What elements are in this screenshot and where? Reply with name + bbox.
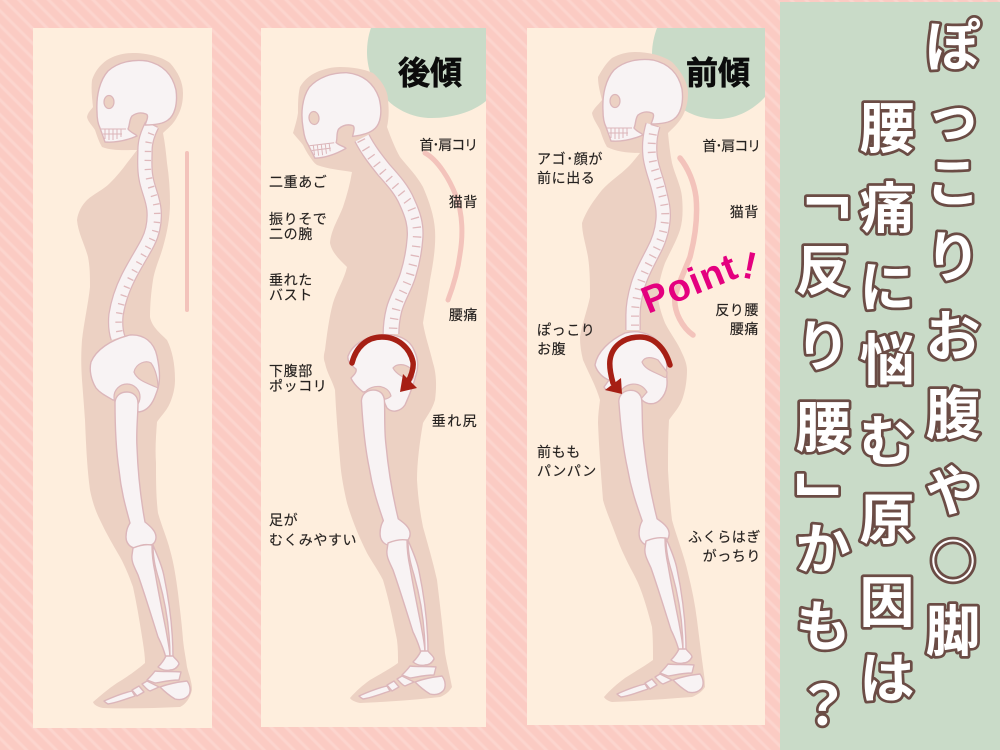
- title: column 3: 反り腰: [795, 226, 851, 463]
- posture line: [185, 153, 189, 310]
- icon: femur: [618, 388, 670, 547]
- panel: anterior tilt: [527, 28, 765, 725]
- labels: posterior tilt left: 振りそで: [269, 211, 327, 227]
- callout: Point!: Point: [636, 246, 744, 322]
- labels: anterior tilt left: 前に出る: [537, 170, 595, 186]
- icon: pelvis: [90, 335, 160, 412]
- icon: skull: [97, 60, 177, 142]
- title: column 3: [774, 156, 876, 741]
- labels: anterior tilt left: お腹: [537, 341, 566, 357]
- title: column 3: 」: [784, 472, 876, 536]
- labels: anterior tilt left: ぽっこり: [537, 322, 595, 338]
- labels: posterior tilt left: 二重あご: [269, 174, 327, 190]
- body silhouette: posterior tilt: [293, 67, 452, 703]
- labels: posterior tilt left: ポッコリ: [269, 378, 327, 394]
- icon: shin and foot bones: [104, 545, 190, 704]
- panel: posterior tilt: [261, 28, 486, 727]
- posture curve: [425, 153, 462, 300]
- arrow: forward pelvic rotation: [605, 337, 670, 394]
- labels: posterior tilt left: 二の腕: [269, 226, 313, 242]
- labels: posterior tilt left: むくみやすい: [269, 532, 357, 548]
- icon: spine: [633, 125, 665, 330]
- labels: anterior tilt left: 前もも: [537, 444, 581, 460]
- arrow: backward pelvic rotation: [352, 337, 417, 392]
- labels: posterior tilt left: [269, 174, 357, 548]
- labels: posterior tilt right: 首･肩コリ: [420, 137, 477, 153]
- icon: shin and foot bones: [359, 540, 445, 699]
- title: column 2: 腰痛に悩む原因は: [859, 84, 915, 714]
- body silhouette: neutral: [77, 53, 192, 708]
- labels: posterior tilt left: バスト: [269, 287, 313, 303]
- labels: posterior tilt right: 猫背: [449, 194, 478, 210]
- body silhouette: anterior tilt: [580, 52, 705, 702]
- icon: skull: [603, 59, 683, 141]
- labels: anterior tilt right: 猫背: [730, 204, 759, 220]
- title: column 1: 脚: [925, 587, 981, 667]
- posture curve: [675, 158, 697, 335]
- panel: title: [774, 2, 1000, 750]
- labels: anterior tilt left: [537, 151, 603, 479]
- labels: posterior tilt right: 垂れ尻: [432, 413, 478, 429]
- title: column 3: 「: [774, 156, 866, 220]
- icon: femur: [115, 392, 156, 548]
- labels: anterior tilt right: 反り腰: [715, 302, 759, 318]
- labels: anterior tilt right: 首･肩コリ: [702, 138, 760, 154]
- icon: pelvis: [348, 335, 418, 411]
- labels: posterior tilt right: [420, 137, 478, 429]
- title: column 1: ○: [930, 526, 976, 592]
- labels: anterior tilt left: パンパン: [537, 463, 597, 479]
- labels: posterior tilt left: 足が: [269, 512, 298, 528]
- icon: shin and foot bones: [617, 538, 703, 697]
- heading circle: [652, 28, 765, 119]
- callout: Point!: !: [739, 245, 760, 288]
- labels: anterior tilt left: アゴ･顔が: [537, 151, 603, 167]
- heading: 後傾: 後傾: [398, 55, 462, 91]
- heading circle: [367, 28, 486, 118]
- labels: posterior tilt left: 垂れた: [269, 272, 313, 288]
- icon: skull: [297, 68, 386, 159]
- labels: anterior tilt right: [688, 138, 761, 564]
- labels: anterior tilt right: ふくらはぎ: [688, 529, 761, 545]
- icon: femur: [361, 388, 411, 546]
- labels: posterior tilt left: 下腹部: [269, 363, 313, 379]
- panel: neutral posture: [33, 28, 212, 728]
- labels: posterior tilt right: 腰痛: [449, 307, 478, 323]
- title: column 1: ぽっこりお腹や: [925, 2, 981, 527]
- heading: 前傾: 前傾: [686, 55, 750, 91]
- labels: anterior tilt right: 腰痛: [730, 321, 759, 337]
- icon: spine: [116, 125, 157, 338]
- labels: anterior tilt right: がっちり: [703, 548, 761, 564]
- title: column 3: かも？: [795, 505, 851, 741]
- icon: pelvis: [595, 332, 667, 404]
- icon: spine: [361, 138, 417, 334]
